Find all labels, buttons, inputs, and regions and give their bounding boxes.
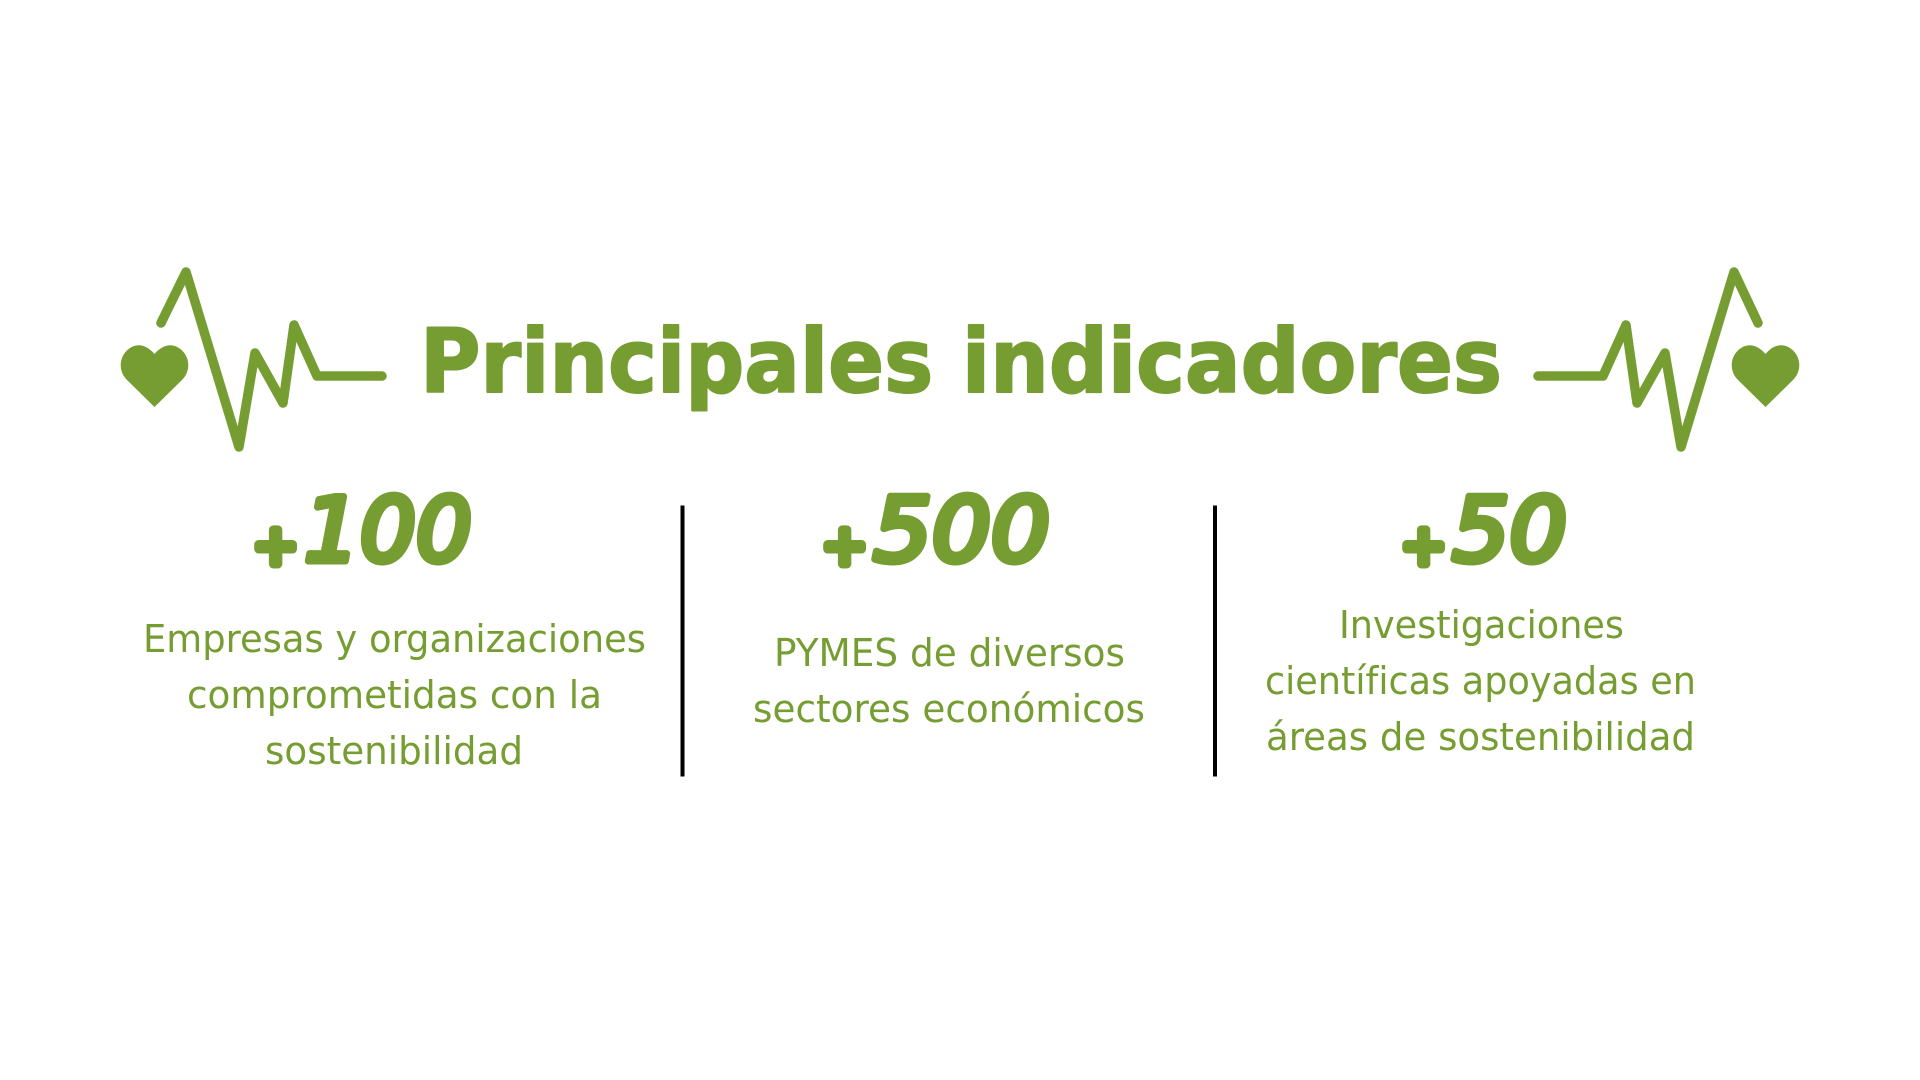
title: Principales indicadores [420, 310, 1502, 413]
panel: indicator 1 [143, 479, 646, 773]
description: research [1265, 603, 1696, 759]
icon: left heartbeat with heart [121, 272, 382, 447]
description: companies: Empresas y organizaciones [143, 617, 646, 661]
description: SMEs: sectores económicos [753, 687, 1145, 731]
panel: indicator 2 [753, 479, 1145, 731]
number: +50: 50 [1452, 479, 1567, 582]
number: +500: 500 [873, 479, 1050, 582]
number: +50: + [1401, 514, 1446, 577]
description: SMEs [753, 631, 1145, 731]
description: research: Investigaciones [1339, 603, 1624, 647]
description: companies: comprometidas con la [187, 673, 602, 717]
panel: indicator 3 [1265, 479, 1696, 759]
description: research: áreas de sostenibilidad [1266, 715, 1695, 759]
description: research: científicas apoyadas en [1265, 659, 1696, 703]
number: +500: + [822, 514, 867, 577]
divider left [680, 506, 684, 776]
number: +100: + [253, 514, 298, 577]
description: SMEs: PYMES de diversos [774, 631, 1125, 675]
icon: right heartbeat with heart [1538, 272, 1799, 447]
divider right [1213, 506, 1217, 776]
description: companies: sostenibilidad [265, 729, 523, 773]
description: companies [143, 617, 646, 773]
number: +100: 100 [304, 479, 472, 582]
